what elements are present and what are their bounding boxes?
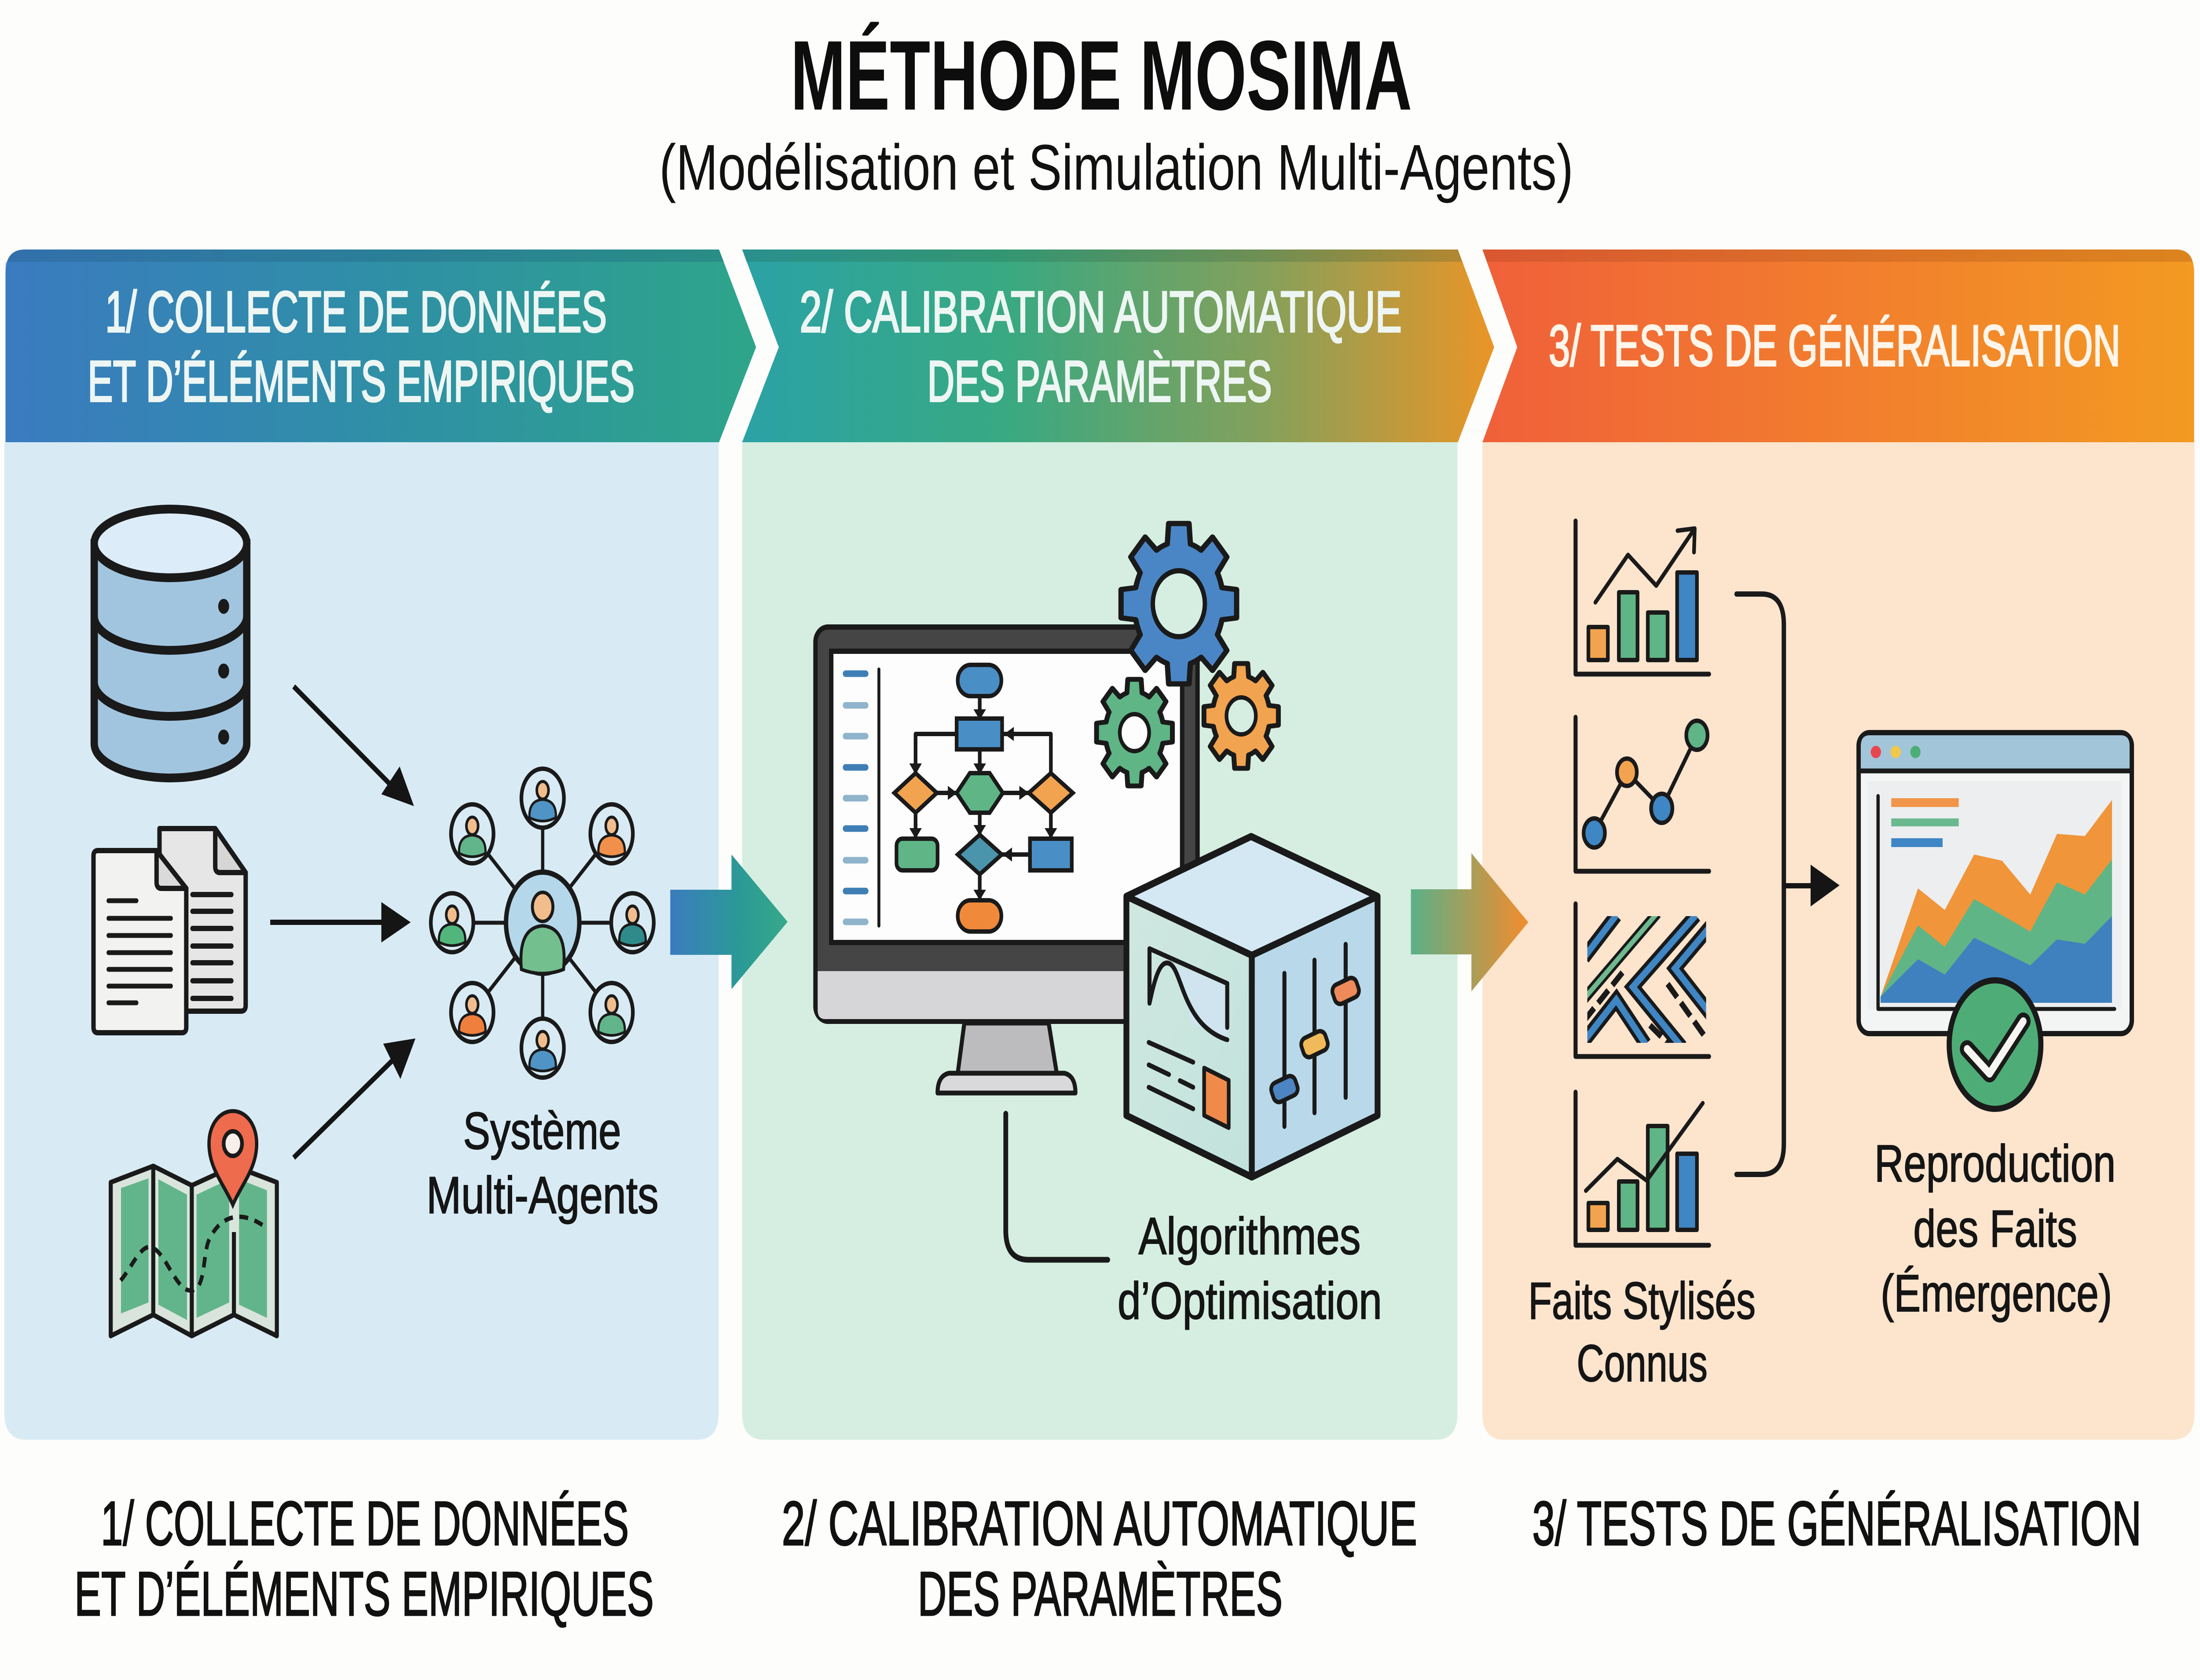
header: étape 1: 1/ COLLECTE DE DONNÉES xyxy=(105,279,607,344)
chart: line with points xyxy=(1576,717,1709,871)
label: système multi-agents: Système xyxy=(463,1102,621,1160)
panel: collecte de données xyxy=(4,249,756,1440)
label: système multi-agents xyxy=(426,1102,659,1225)
icon: map with pin xyxy=(111,1111,277,1336)
caption: étape 2 xyxy=(782,1489,1417,1629)
header: étape 2: DES PARAMÈTRES xyxy=(928,348,1272,414)
caption: étape 1: ET D’ÉLÉMENTS EMPIRIQUES xyxy=(74,1559,654,1629)
caption: étape 1 xyxy=(74,1489,654,1629)
chart: bars with trend arrow xyxy=(1576,521,1709,674)
label: faits stylisés connus xyxy=(1528,1272,1756,1393)
panel: calibration automatique xyxy=(742,249,1494,1440)
connector: algorithmes xyxy=(1006,1114,1108,1260)
label: algorithmes d'optimisation: Algorithmes xyxy=(1139,1207,1361,1266)
icon: algorithm cube xyxy=(1126,836,1378,1177)
caption: étape 2: DES PARAMÈTRES xyxy=(918,1559,1283,1629)
chart: bars with trend line xyxy=(1576,1092,1709,1245)
arrow: étape 2 to étape 3 xyxy=(1411,853,1528,991)
bracket xyxy=(1737,594,1784,1174)
label: algorithmes d'optimisation xyxy=(1118,1207,1382,1330)
header: étape 2: 2/ CALIBRATION AUTOMATIQUE xyxy=(800,279,1402,344)
label: reproduction des faits: (Émergence) xyxy=(1881,1265,2112,1323)
label: algorithmes d'optimisation: d’Optimisation xyxy=(1118,1272,1382,1330)
label: faits stylisés connus: Connus xyxy=(1577,1335,1708,1393)
arrow: bracket to result xyxy=(1785,865,1840,906)
icon: database xyxy=(94,509,247,778)
title: MÉTHODE MOSIMA xyxy=(791,20,1412,131)
label: reproduction des faits: des Faits xyxy=(1913,1200,2077,1258)
icon: green gear xyxy=(1096,679,1173,786)
icon: documents xyxy=(93,829,246,1033)
flowchart xyxy=(894,665,1073,932)
icon: computer monitor with flowchart xyxy=(815,627,1198,1093)
chart: chevron pattern xyxy=(1576,904,1712,1056)
label: faits stylisés connus: Faits Stylisés xyxy=(1528,1272,1756,1330)
arrow: map to agents xyxy=(294,1038,415,1158)
icon: multi-agent network xyxy=(431,769,654,1078)
arrow: documents to agents xyxy=(270,902,411,943)
badge: check mark xyxy=(1949,980,2041,1109)
icon: orange gear xyxy=(1204,664,1278,768)
arrow: étape 1 to étape 2 xyxy=(670,855,788,989)
label: reproduction des faits xyxy=(1874,1135,2116,1323)
icon: blue gear xyxy=(1121,524,1236,684)
header: étape 1: ET D’ÉLÉMENTS EMPIRIQUES xyxy=(88,348,634,414)
header: étape 3 xyxy=(1482,249,2194,442)
caption: étape 2: 2/ CALIBRATION AUTOMATIQUE xyxy=(782,1489,1417,1558)
sidebar list xyxy=(846,669,879,926)
panel: tests de généralisation xyxy=(1482,249,2195,1440)
label: reproduction des faits: Reproduction xyxy=(1874,1135,2116,1193)
caption: étape 1: 1/ COLLECTE DE DONNÉES xyxy=(101,1489,629,1558)
arrow: database to agents xyxy=(294,686,414,806)
subtitle: (Modélisation et Simulation Multi-Agents) xyxy=(659,131,1573,204)
header: étape 1 xyxy=(5,249,756,442)
label: système multi-agents: Multi-Agents xyxy=(426,1166,659,1225)
icon: result browser window xyxy=(1859,733,2132,1109)
header: étape 2 xyxy=(742,249,1494,442)
